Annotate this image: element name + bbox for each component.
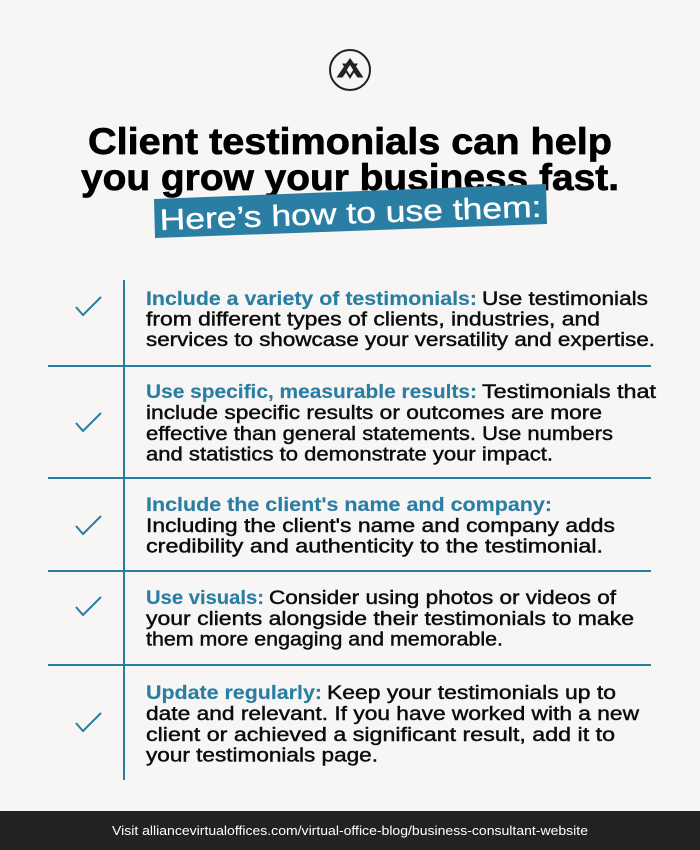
item 1: Use testimonials <box>482 288 648 310</box>
item 1: Include a variety of testimonials: <box>146 288 477 310</box>
item 3: credibility and authenticity to the testimonial. <box>146 536 603 558</box>
item 5: date and relevant. If you have worked with a new <box>146 703 640 725</box>
item 4 <box>146 587 634 650</box>
item 5: Update regularly: <box>146 682 322 704</box>
title: you grow your business fast. <box>81 157 619 198</box>
item 2: and statistics to demonstrate your impact. <box>146 444 553 466</box>
item 3 <box>146 494 615 558</box>
item 3: Include the client's name and company: <box>146 494 552 516</box>
title <box>81 121 619 198</box>
item 2: effective than general statements. Use numbers <box>146 423 613 445</box>
item 2: include specific results or outcomes are more <box>146 402 602 424</box>
item 2 <box>146 381 657 466</box>
item 5: Keep your testimonials up to <box>327 682 616 704</box>
item 4: your clients alongside their testimonials to make <box>146 608 634 630</box>
item 4: Consider using photos or videos of <box>269 587 617 609</box>
table grid <box>48 280 651 780</box>
icon: check 1 <box>76 297 101 315</box>
item 5: client or achieved a significant result, add it to <box>146 724 615 746</box>
icon: check 5 <box>76 713 101 731</box>
subtitle banner: Here’s how to use them: <box>159 191 542 237</box>
item 1: from different types of clients, industries, and <box>146 308 600 330</box>
title: Client testimonials can help <box>88 121 612 162</box>
item 5 <box>146 682 640 766</box>
item 2: Use specific, measurable results: <box>146 381 477 403</box>
icon: check 2 <box>76 413 101 431</box>
subtitle banner <box>154 184 547 238</box>
item 3: Including the client's name and company adds <box>146 515 615 537</box>
icon: logo <box>330 50 370 90</box>
icon: check 4 <box>76 597 101 615</box>
item 5: your testimonials page. <box>146 744 378 766</box>
item 4: Use visuals: <box>146 587 264 609</box>
item 1 <box>146 288 655 351</box>
item 2: Testimonials that <box>482 381 657 403</box>
footer bar: Visit alliancevirtualoffices.com/virtual-office-blog/business-consultant-website <box>112 824 588 838</box>
item 4: them more engaging and memorable. <box>146 628 503 650</box>
icon: check 3 <box>76 516 101 534</box>
footer bar <box>0 811 700 850</box>
item 1: services to showcase your versatility and expertise. <box>146 329 655 351</box>
